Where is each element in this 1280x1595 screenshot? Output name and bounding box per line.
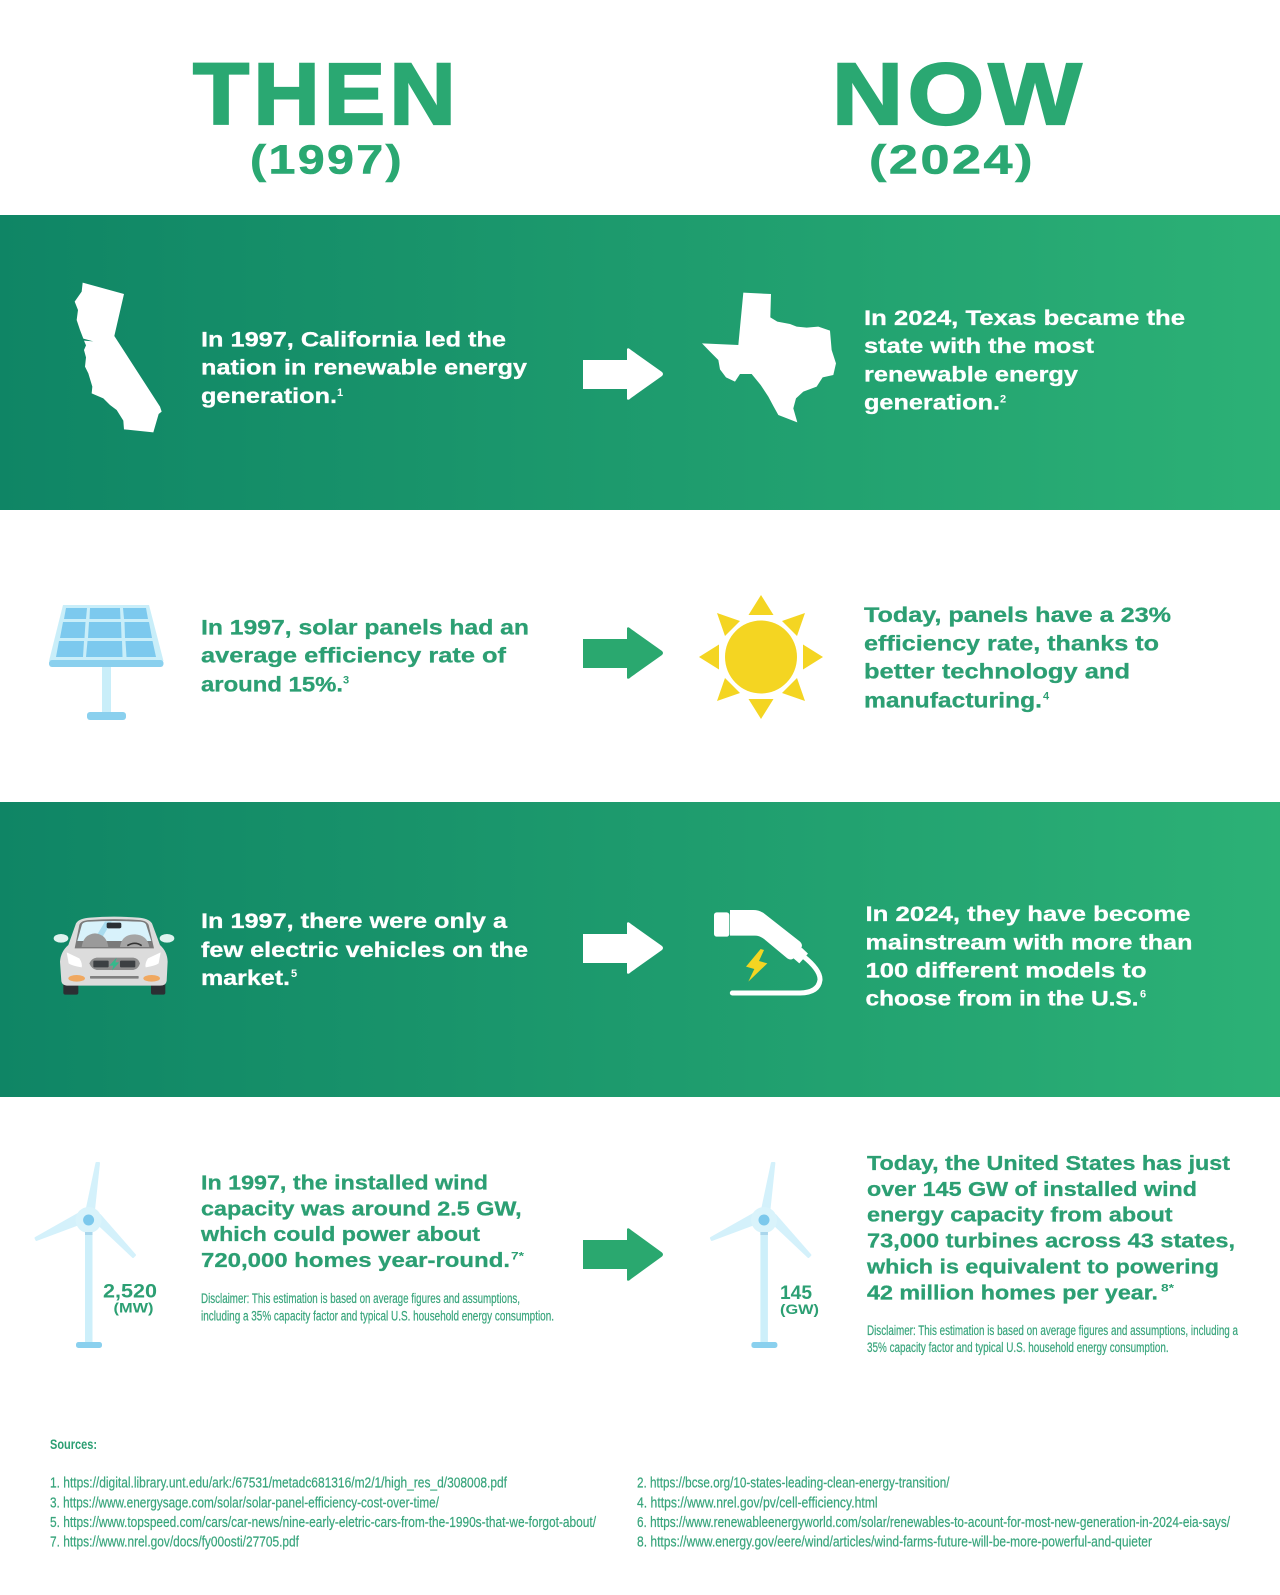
- icon: Texas: [702, 293, 836, 422]
- arrow: states: [583, 348, 663, 400]
- icon: sun: [699, 595, 823, 719]
- text: EVs 1997: few electric vehicles on the: [201, 938, 528, 962]
- text: wind 2024: energy capacity from about: [867, 1204, 1173, 1226]
- heading: sources: Sources:: [50, 1436, 97, 1452]
- disclaimer: wind 1997: including a 35% capacity factor and typical U.S. household energy consumption.: [201, 1309, 554, 1324]
- text: solar 2024: manufacturing.: [864, 688, 1042, 712]
- icon: EV charging plug: [714, 910, 820, 993]
- sources: left column: [50, 1476, 597, 1551]
- text: California 1997: In 1997, California led the: [201, 328, 506, 352]
- text: Texas 2024: renewable energy: [864, 362, 1078, 386]
- text: solar 2024: Today, panels have a 23%: [864, 603, 1171, 627]
- icon: solar panel: [49, 605, 164, 720]
- text: California 1997: nation in renewable energy: [201, 356, 527, 380]
- panel: states band: [0, 215, 1280, 510]
- label: 145 GW: (GW): [780, 1301, 819, 1317]
- text: Texas 2024: generation.: [864, 390, 1000, 414]
- text: solar 2024: better technology and: [864, 660, 1130, 684]
- disclaimer: wind 1997: Disclaimer: This estimation is based on average figures and assumptions,: [201, 1291, 520, 1306]
- sources: right column: 4. https://www.nrel.gov/pv/cell-efficiency.html: [637, 1496, 878, 1512]
- sources: right column: 2. https://bcse.org/10-states-leading-clean-energy-transition/: [637, 1476, 950, 1492]
- label: 2,520 MW: [103, 1282, 157, 1316]
- text: wind 1997: [200, 1172, 525, 1272]
- text: EVs 1997: 5: [291, 968, 297, 980]
- text: wind 1997: 720,000 homes year-round.: [201, 1249, 510, 1272]
- disclaimer: wind 2024: 35% capacity factor and typical U.S. household energy consumption.: [867, 1340, 1169, 1355]
- sources: left column: 5. https://www.topspeed.com/cars/car-news/nine-early-eletric-cars-from-the-1990s-that-we-forgot-about/: [50, 1515, 597, 1531]
- sources: right column: 8. https://www.energy.gov/eere/wind/articles/wind-farms-future-will-be-more-powerful-and-quieter: [637, 1535, 1152, 1551]
- text: California 1997: 1: [337, 387, 343, 399]
- text: wind 2024: 73,000 turbines across 43 states,: [867, 1230, 1235, 1252]
- text: Texas 2024: In 2024, Texas became the: [864, 306, 1185, 330]
- sources: right column: [637, 1476, 1231, 1551]
- arrow: wind: [583, 1228, 663, 1281]
- heading: now: [832, 46, 1086, 182]
- text: California 1997: [201, 328, 527, 408]
- arrow: solar: [583, 627, 663, 679]
- text: Texas 2024: state with the most: [864, 334, 1094, 358]
- text: wind 1997: capacity was around 2.5 GW,: [201, 1198, 522, 1220]
- text: EVs 2024: [866, 902, 1192, 1010]
- heading: then: THEN: [193, 46, 460, 143]
- icon: California: [75, 283, 162, 432]
- text: EVs 2024: In 2024, they have become: [866, 902, 1191, 926]
- text: wind 2024: [866, 1152, 1235, 1304]
- text: California 1997: generation.: [201, 384, 337, 408]
- text: EVs 2024: choose from in the U.S.: [866, 986, 1138, 1010]
- sources: left column: 1. https://digital.library.unt.edu/ark:/67531/metadc681316/m2/1/high_res_d/308008.pdf: [50, 1476, 508, 1492]
- text: wind 1997: which could power about: [200, 1223, 480, 1246]
- sources: left column: 7. https://www.nrel.gov/docs/fy00osti/27705.pdf: [50, 1535, 300, 1551]
- text: solar 1997: In 1997, solar panels had an: [201, 616, 529, 640]
- text: EVs 2024: 6: [1140, 988, 1146, 1000]
- text: wind 2024: over 145 GW of installed wind: [867, 1178, 1197, 1201]
- icon: wind turbine 1997: [36, 1163, 135, 1348]
- text: solar 1997: 3: [343, 674, 349, 686]
- text: solar 1997: average efficiency rate of: [201, 644, 507, 668]
- text: solar 2024: efficiency rate, thanks to: [864, 632, 1159, 656]
- text: wind 2024: 8*: [1161, 1282, 1175, 1294]
- text: EVs 2024: mainstream with more than: [866, 930, 1192, 954]
- text: EVs 1997: market.: [201, 966, 290, 990]
- label: 145 GW: [780, 1283, 819, 1317]
- sources: left column: 3. https://www.energysage.com/solar/solar-panel-efficiency-cost-over-time/: [50, 1496, 440, 1512]
- arrow: EVs: [583, 922, 663, 974]
- text: Texas 2024: [864, 306, 1185, 414]
- text: wind 2024: Today, the United States has just: [867, 1152, 1230, 1175]
- text: solar 1997: around 15%.: [201, 672, 343, 696]
- label: 145 GW: 145: [780, 1283, 812, 1304]
- text: solar 2024: [864, 603, 1171, 712]
- text: EVs 2024: 100 different models to: [866, 958, 1146, 982]
- heading: then: [193, 46, 460, 182]
- text: solar 1997: [201, 616, 529, 696]
- disclaimer: wind 1997: [201, 1291, 554, 1324]
- text: wind 2024: 42 million homes per year.: [867, 1282, 1158, 1304]
- text: EVs 1997: In 1997, there were only a: [201, 909, 508, 933]
- text: wind 2024: which is equivalent to powering: [866, 1256, 1219, 1278]
- label: 2,520 MW: 2,520: [103, 1282, 157, 1303]
- heading: now: (2024): [869, 136, 1035, 182]
- icon: wind turbine 2024: [711, 1163, 810, 1348]
- panel: electric vehicles band: [0, 802, 1280, 1097]
- text: wind 1997: In 1997, the installed wind: [201, 1172, 488, 1194]
- disclaimer: wind 2024: [867, 1323, 1238, 1355]
- heading: now: NOW: [832, 46, 1086, 143]
- icon: electric car: [54, 917, 174, 995]
- label: 2,520 MW: (MW): [114, 1300, 154, 1316]
- text: solar 2024: 4: [1043, 690, 1050, 702]
- text: EVs 1997: [201, 909, 528, 990]
- heading: then: (1997): [250, 136, 404, 182]
- text: Texas 2024: 2: [1000, 394, 1006, 406]
- text: wind 1997: 7*: [511, 1250, 525, 1262]
